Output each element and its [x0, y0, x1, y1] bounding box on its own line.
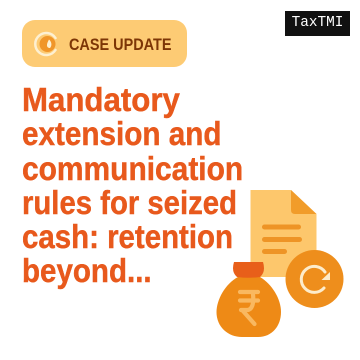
logo: TaxTMI: TaxTMI	[292, 15, 343, 31]
icon: badge emblem	[34, 32, 57, 56]
title: extension and	[22, 115, 221, 152]
icon: refresh circle	[286, 250, 344, 308]
title: rules for seized	[22, 184, 237, 221]
icon: document	[250, 190, 316, 277]
badge label: CASE UPDATE	[68, 35, 171, 54]
illustration: document, refresh and money bag	[216, 190, 344, 337]
title: communication	[22, 150, 243, 187]
title: cash: retention	[22, 218, 233, 255]
title: Mandatory	[22, 81, 180, 118]
title	[22, 81, 243, 290]
rupee symbol	[240, 292, 258, 324]
badge: case update	[22, 20, 186, 67]
icon: money bag	[216, 262, 281, 337]
logo: TaxTMI	[285, 11, 350, 36]
title: beyond...	[22, 252, 152, 289]
